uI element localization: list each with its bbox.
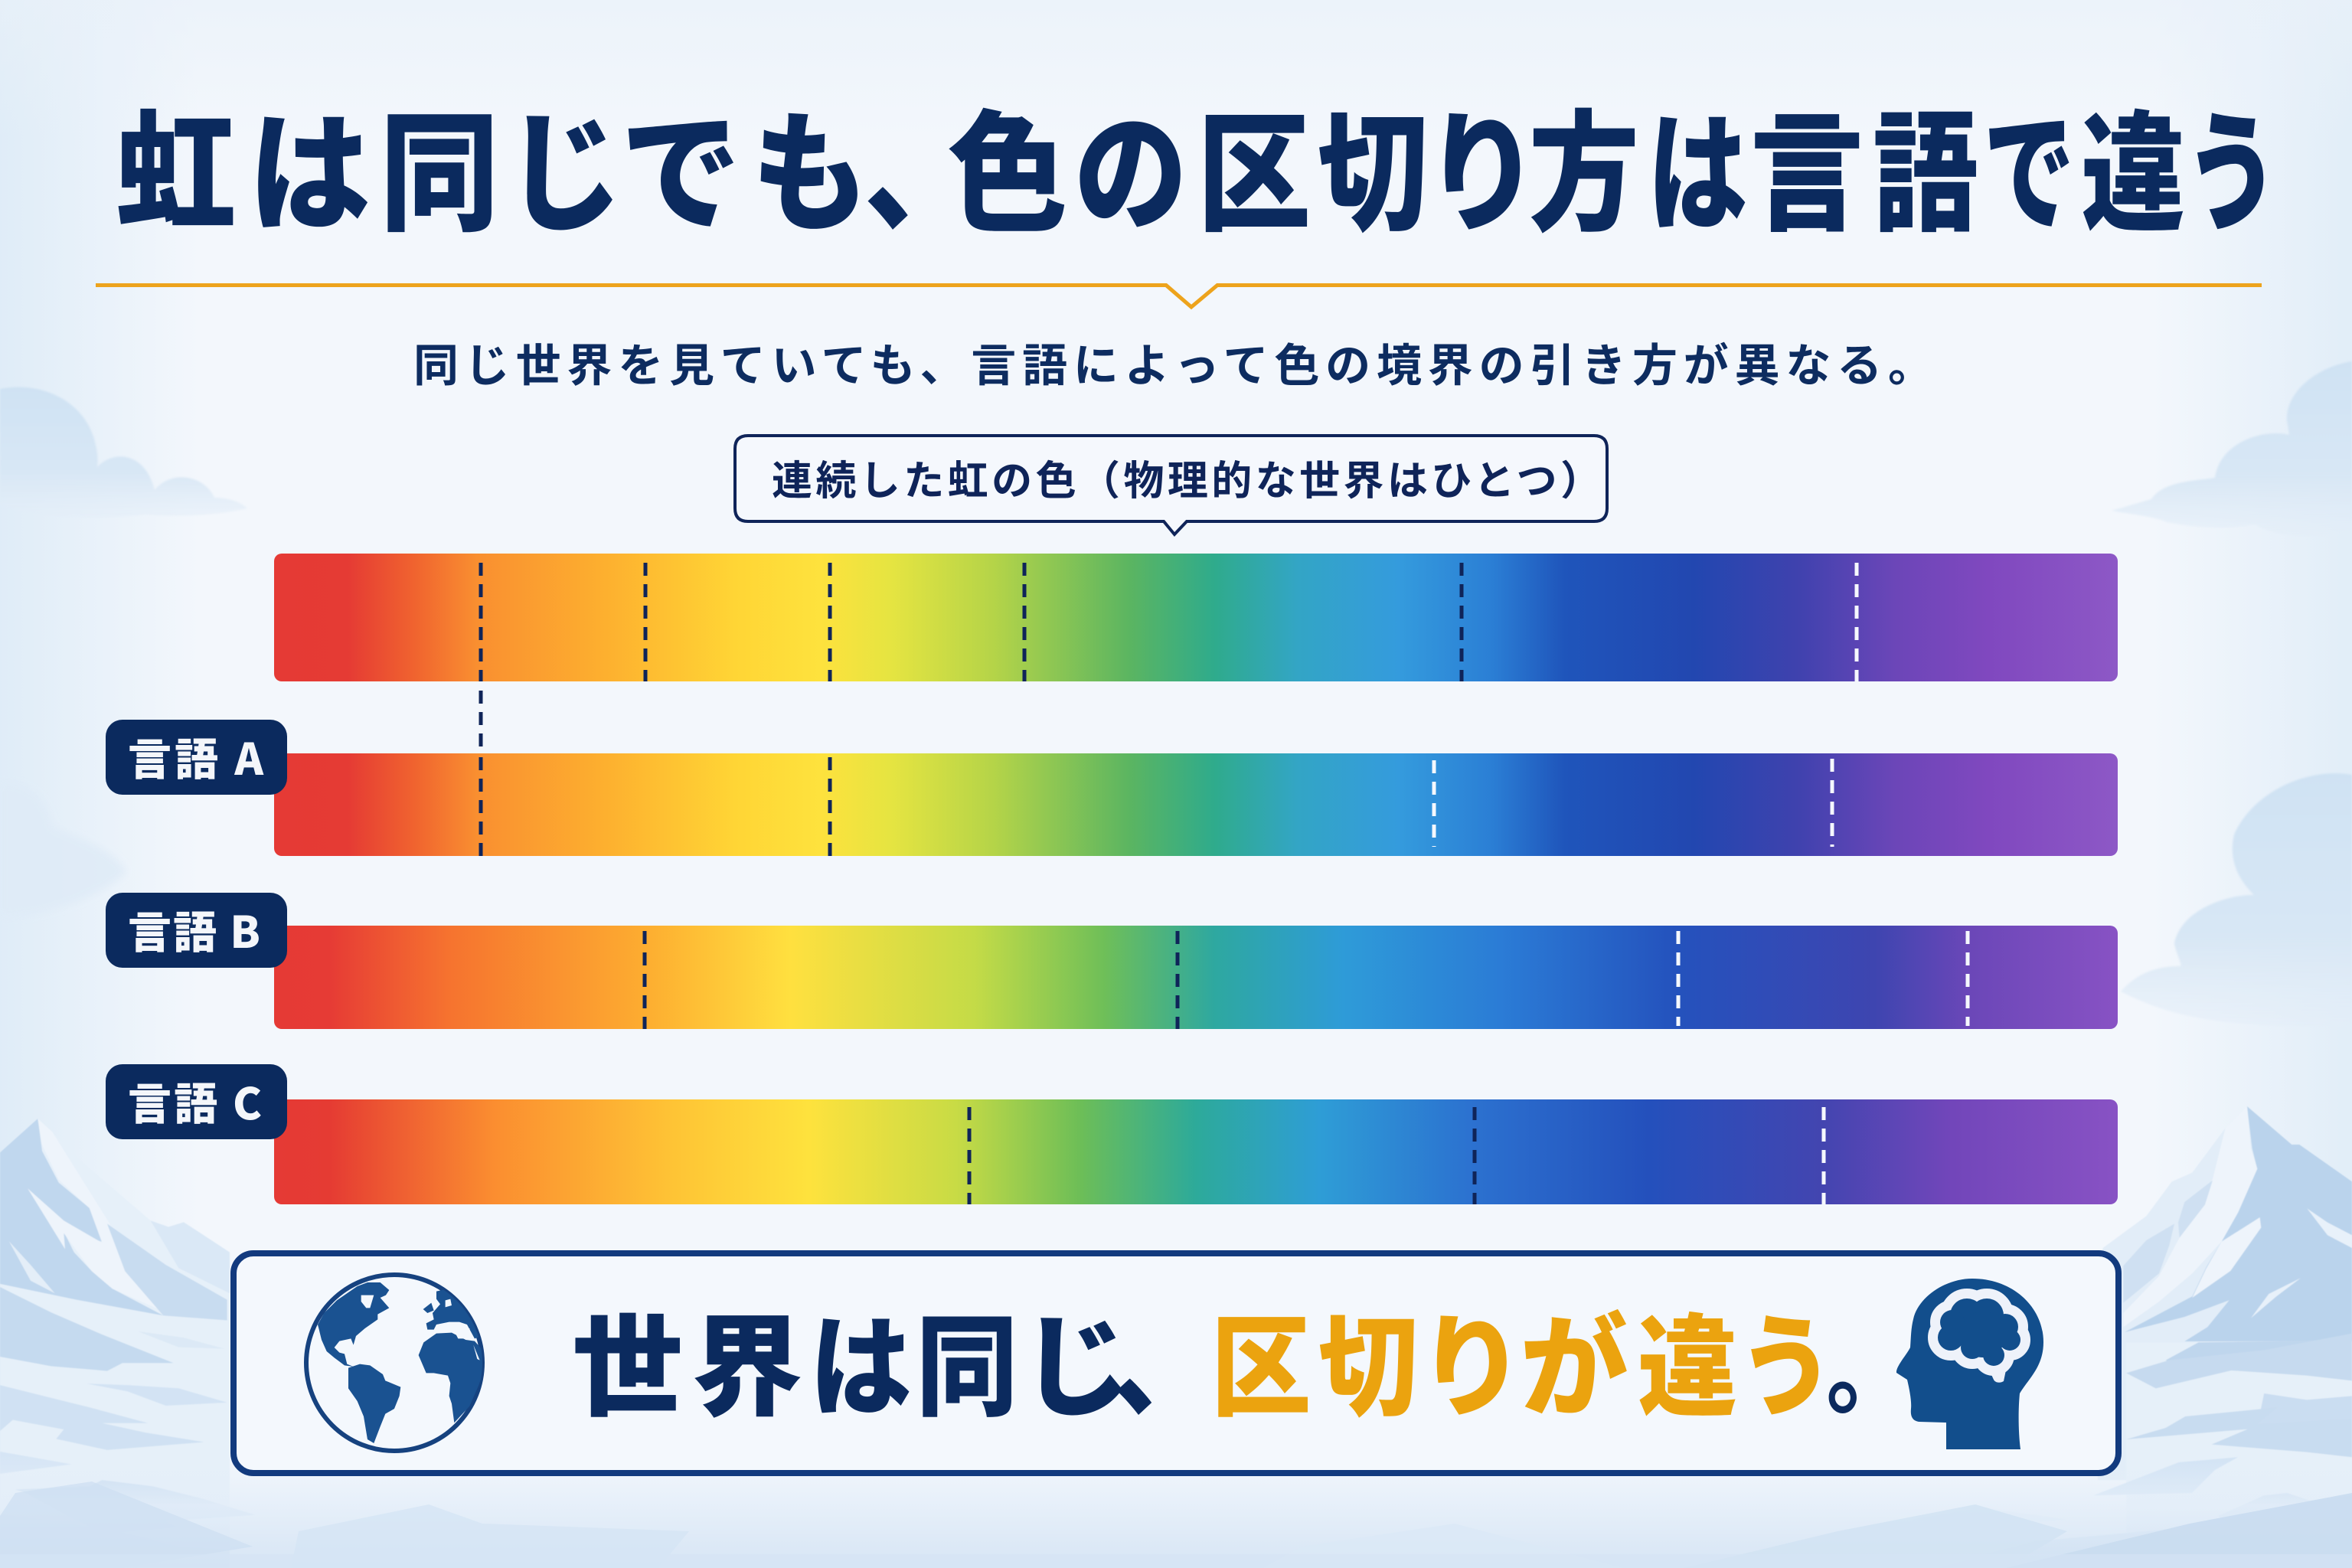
brain core: [1938, 1298, 2020, 1366]
connector dashed line to language A: [479, 691, 482, 750]
title: 区: [1197, 69, 1311, 257]
title: 色: [948, 70, 1067, 258]
title: 言: [1750, 69, 1864, 257]
mountain: right: [2098, 1106, 2352, 1480]
divider with notch: [96, 285, 2262, 307]
conclusion text: 、: [1113, 1278, 1216, 1439]
title: で: [621, 70, 740, 258]
conclusion text: り: [1418, 1278, 1525, 1439]
callout text: 連続した虹の色（物理的な世界はひとつ）: [772, 449, 1601, 507]
boundaries C: [969, 1107, 1824, 1204]
language B row: [106, 893, 2118, 1029]
bar A: [274, 753, 2118, 856]
cloud: upper left: [0, 387, 247, 518]
conclusion text: [572, 1278, 1913, 1439]
conclusion text: 区: [1211, 1278, 1311, 1439]
conclusion text: は: [809, 1278, 912, 1439]
bar C: [274, 1099, 2118, 1204]
conclusion text: じ: [1021, 1278, 1132, 1439]
conclusion text: 違: [1638, 1278, 1737, 1439]
mountain: left: [0, 1119, 255, 1568]
conclusion text: 切: [1318, 1278, 1418, 1439]
brain outline: [1938, 1298, 2020, 1366]
title: り: [1425, 70, 1540, 258]
cloud: upper right: [2112, 361, 2352, 537]
conclusion text: う: [1739, 1278, 1834, 1439]
title: は: [248, 69, 371, 257]
boundaries: continuous bar: [481, 563, 1857, 681]
title: の: [1074, 69, 1187, 257]
conclusion text: 同: [916, 1278, 1018, 1439]
brain stem: [1983, 1357, 2007, 1383]
title: 方: [1529, 70, 1639, 258]
title: 違: [2081, 69, 2185, 258]
label C: 言語 C: [128, 1070, 262, 1132]
conclusion text: 。: [1826, 1292, 1913, 1434]
callout: continuous rainbow: [735, 436, 1607, 534]
title: 語: [1873, 69, 1978, 257]
label B: 言語 B: [128, 898, 260, 961]
conclusion panel: [234, 1253, 2118, 1473]
title: う: [2185, 69, 2278, 257]
label A: [106, 720, 287, 795]
title: 切: [1318, 70, 1428, 258]
spectrum: physical continuous rainbow: [274, 554, 2118, 681]
title: 虹: [116, 70, 237, 258]
conclusion text: が: [1521, 1279, 1628, 1439]
label B: [106, 893, 287, 968]
title: じ: [505, 68, 623, 257]
icon: globe: [306, 1275, 485, 1451]
title: も: [751, 68, 869, 257]
bar B: [274, 926, 2118, 1029]
language A row: [106, 720, 2118, 856]
conclusion text: 世: [572, 1278, 683, 1439]
title: 同: [380, 70, 499, 258]
language C row: [106, 1064, 2118, 1204]
icon: head with brain: [1896, 1279, 2043, 1449]
boundaries B: [645, 931, 1968, 1029]
conclusion text: 界: [692, 1278, 802, 1439]
title: で: [1984, 70, 2074, 258]
mountain: right foothills: [1913, 1334, 2352, 1568]
boundaries A: [481, 757, 1832, 856]
label C: [106, 1064, 287, 1139]
title: 、: [864, 68, 982, 257]
subtitle: 同じ世界を見ていても、言語によって色の境界の引き方が異なる。: [413, 329, 1933, 394]
cloud: middle left: [0, 782, 126, 917]
title: は: [1648, 69, 1747, 257]
label A: 言語 A: [128, 725, 264, 788]
title: [116, 68, 2278, 258]
cloud: middle right: [2121, 773, 2352, 1027]
ground wash along bottom: [0, 1455, 2352, 1568]
